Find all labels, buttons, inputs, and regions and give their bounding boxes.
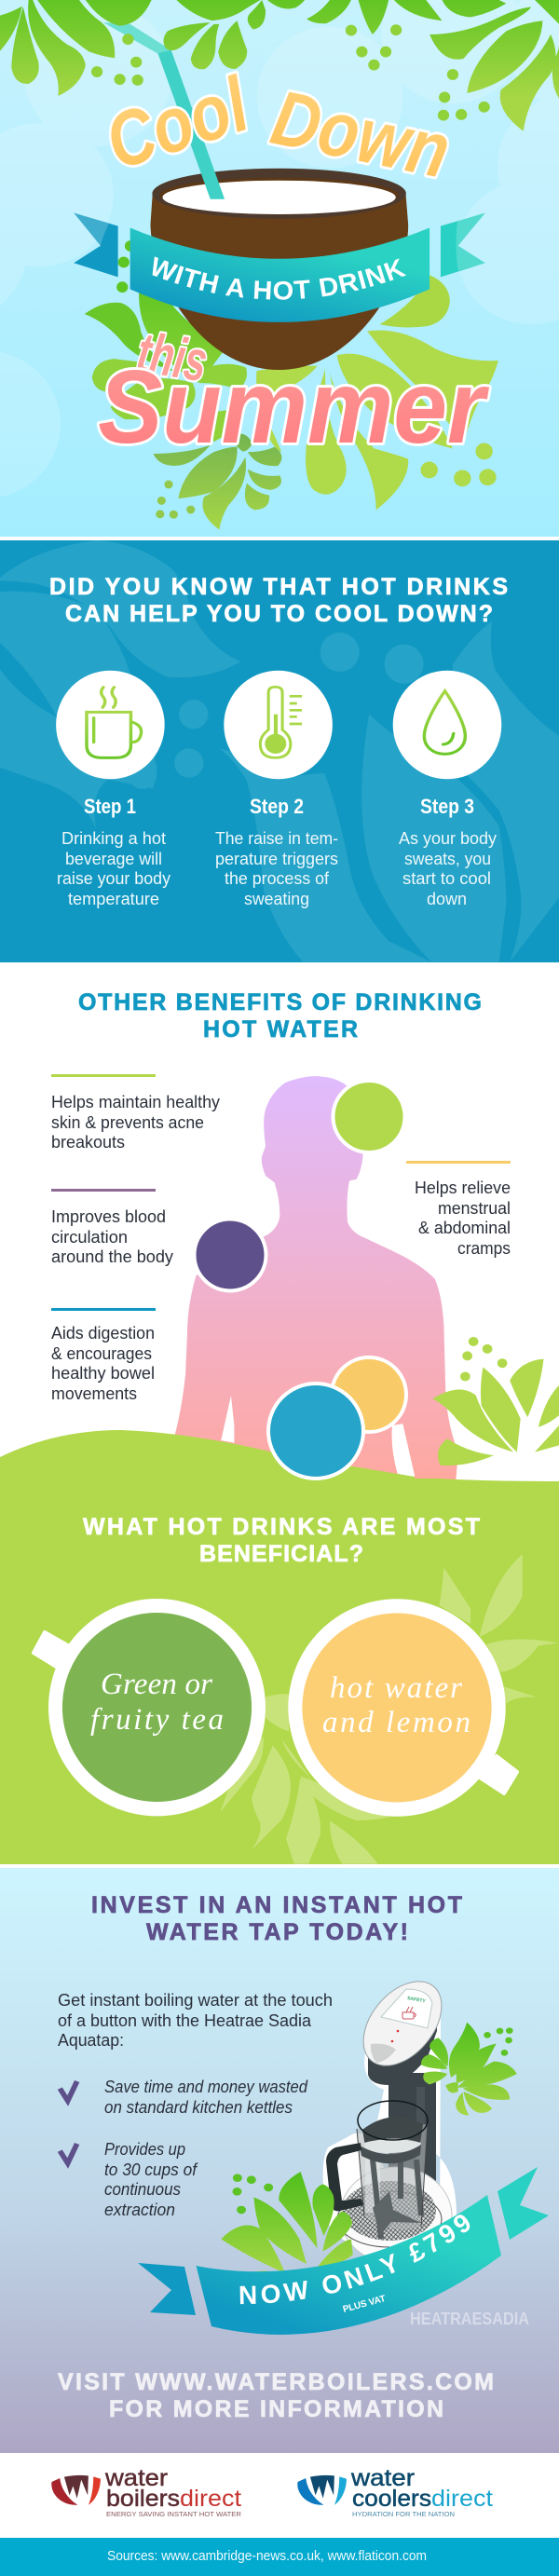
logo: water boilers direct: boilers xyxy=(106,2486,180,2512)
cup: green or fruity tea: fruity tea xyxy=(90,1703,224,1737)
step 1: Step 1 xyxy=(84,795,136,818)
press: handle xyxy=(326,2143,363,2211)
cup: green or fruity tea xyxy=(34,1599,266,1816)
logo: water coolers direct xyxy=(297,2465,493,2518)
step 2: sweating xyxy=(244,890,309,908)
step 2: The raise in tem- xyxy=(215,829,338,848)
logo: water coolers direct: water xyxy=(350,2465,415,2491)
benefit: skin xyxy=(51,1074,220,1152)
step 1: temperature xyxy=(68,890,159,908)
heading: WATER TAP TODAY! xyxy=(146,1919,408,1945)
price ribbon xyxy=(138,2167,549,2335)
panel: hero xyxy=(0,0,559,537)
title: this xyxy=(132,321,211,394)
benefit: circulation: Improves blood xyxy=(51,1207,166,1226)
benefit: cramps: menstrual xyxy=(438,1199,511,1218)
heading: INVEST IN AN INSTANT HOT xyxy=(91,1892,462,1918)
ribbon xyxy=(74,212,485,322)
footer: Sources: www.cambridge-news.co.uk, www.flaticon.com xyxy=(107,2548,427,2564)
product: tap: SAFETY xyxy=(407,1996,427,2005)
body silhouette xyxy=(171,1076,458,1483)
press: glass xyxy=(357,2124,428,2229)
step 3: As your body xyxy=(399,829,497,848)
panel: logos xyxy=(0,2453,559,2538)
bullet: 30 cups: extraction xyxy=(104,2201,175,2219)
step 3: sweats, you xyxy=(404,850,491,868)
icon: lower flower xyxy=(221,2172,353,2276)
icon: flower xyxy=(432,1337,559,1465)
call to action: FOR MORE INFORMATION xyxy=(109,2396,443,2422)
intro text: of a button with the Heatrae Sadia xyxy=(58,2011,312,2030)
panel: other benefits xyxy=(0,962,559,1864)
benefit: circulation xyxy=(51,1189,173,1266)
bullet: 30 cups: continuous xyxy=(104,2180,181,2199)
step 2 xyxy=(215,671,338,908)
logo: water coolers direct: coolers xyxy=(352,2486,431,2512)
logo: water boilers direct: ENERGY SAVING INSTANT HOT WATER xyxy=(106,2510,242,2518)
bullet: save time: Save time and money wasted xyxy=(104,2078,308,2096)
benefit: cramps: cramps xyxy=(457,1239,511,1258)
benefit: cramps xyxy=(406,1161,511,1258)
cup: hot water and lemon: hot water xyxy=(330,1671,462,1705)
panel: did you know xyxy=(0,540,559,962)
top leaves xyxy=(0,0,559,131)
price text: NOW ONLY £799 xyxy=(240,2215,470,2305)
press: frame xyxy=(373,2160,421,2239)
panel: hot drinks xyxy=(34,1514,558,1864)
heading: CAN HELP YOU TO COOL DOWN? xyxy=(65,601,493,627)
benefit: digestion: & encourages xyxy=(51,1344,152,1363)
icon: mug xyxy=(87,688,142,757)
title: Cool xyxy=(95,60,260,185)
cup: hot water and lemon: and lemon xyxy=(322,1706,470,1739)
brand mark: HEATRAESADIA xyxy=(410,2310,529,2328)
tap outline halo xyxy=(323,1986,457,2278)
heading: BENEFICIAL? xyxy=(199,1541,363,1567)
green hill xyxy=(0,1430,559,1864)
circle: circulation xyxy=(194,1219,266,1291)
logo: water coolers direct: HYDRATION FOR THE NATION xyxy=(352,2510,455,2518)
benefit: digestion xyxy=(51,1308,156,1403)
title xyxy=(95,60,490,464)
heading: HOT WATER xyxy=(203,1016,358,1043)
step 3: start to cool xyxy=(402,869,491,888)
circle: cramps xyxy=(332,1357,406,1432)
logo: water boilers direct xyxy=(51,2465,242,2518)
logo: water boilers direct: water xyxy=(104,2465,168,2491)
logo: water coolers direct: direct xyxy=(431,2486,493,2512)
benefit: digestion: movements xyxy=(51,1384,137,1403)
icon: upper flower xyxy=(421,2023,517,2116)
benefit: skin: skin & prevents acne xyxy=(51,1113,204,1132)
step 1: raise your body xyxy=(57,869,170,888)
panel: invest in a tap xyxy=(0,1868,559,2453)
tap head xyxy=(368,2003,437,2085)
circle: digestion xyxy=(268,1383,363,1479)
tap column xyxy=(389,2073,436,2208)
benefit: circulation: circulation xyxy=(51,1228,128,1247)
circle: skin xyxy=(334,1081,404,1152)
heading: OTHER BENEFITS OF DRINKING xyxy=(78,989,482,1015)
step 1 xyxy=(56,671,170,908)
step 3 xyxy=(393,671,501,908)
bullet: save time: on standard kitchen kettles xyxy=(104,2098,293,2117)
benefit: digestion: healthy bowel xyxy=(51,1364,155,1383)
step 3: Step 3 xyxy=(420,795,474,818)
benefit: cramps: Helps relieve xyxy=(415,1179,511,1197)
step 1: Drinking a hot xyxy=(61,829,166,848)
logo: water boilers direct: direct xyxy=(180,2486,241,2512)
cup: hot water and lemon xyxy=(288,1599,517,1817)
product: tap xyxy=(323,1967,457,2278)
leaves behind coconut xyxy=(85,240,498,530)
step 2: Step 2 xyxy=(250,795,304,818)
step 2: the process of xyxy=(225,869,330,888)
step 2: perature triggers xyxy=(215,850,338,868)
step 1: beverage will xyxy=(65,850,162,868)
benefit: digestion: Aids digestion xyxy=(51,1324,155,1343)
benefit: circulation: around the body xyxy=(51,1247,173,1266)
heading: WHAT HOT DRINKS ARE MOST xyxy=(83,1514,480,1540)
call to action: VISIT WWW.WATERBOILERS.COM xyxy=(58,2369,494,2395)
intro text: Get instant boiling water at the touch xyxy=(58,1991,333,2010)
cup: green or fruity tea: Green or xyxy=(101,1668,212,1701)
press: base xyxy=(340,2167,452,2264)
step 3: down xyxy=(427,890,467,908)
title: Summer xyxy=(98,348,490,464)
icon: thermometer xyxy=(260,687,302,757)
bullet: save time xyxy=(60,2078,308,2117)
benefit: skin: Helps maintain healthy xyxy=(51,1093,220,1111)
intro text: Aquatap: xyxy=(58,2031,124,2050)
heading: DID YOU KNOW THAT HOT DRINKS xyxy=(49,574,508,600)
title: Down xyxy=(265,74,457,194)
benefit: cramps: & abdominal xyxy=(418,1219,511,1237)
bullet: 30 cups: to 30 cups of xyxy=(104,2160,198,2179)
bullet: 30 cups xyxy=(60,2140,198,2219)
icon: straw xyxy=(103,22,225,199)
ribbon text: WITH A HOT DRINK xyxy=(153,256,406,300)
icon: coconut xyxy=(150,169,408,370)
benefit: skin: breakouts xyxy=(51,1133,125,1152)
icon: water drop xyxy=(424,691,465,754)
footer xyxy=(0,2538,559,2576)
plus vat: PLUS VAT xyxy=(342,2294,387,2315)
bullet: 30 cups: Provides up xyxy=(104,2140,185,2159)
